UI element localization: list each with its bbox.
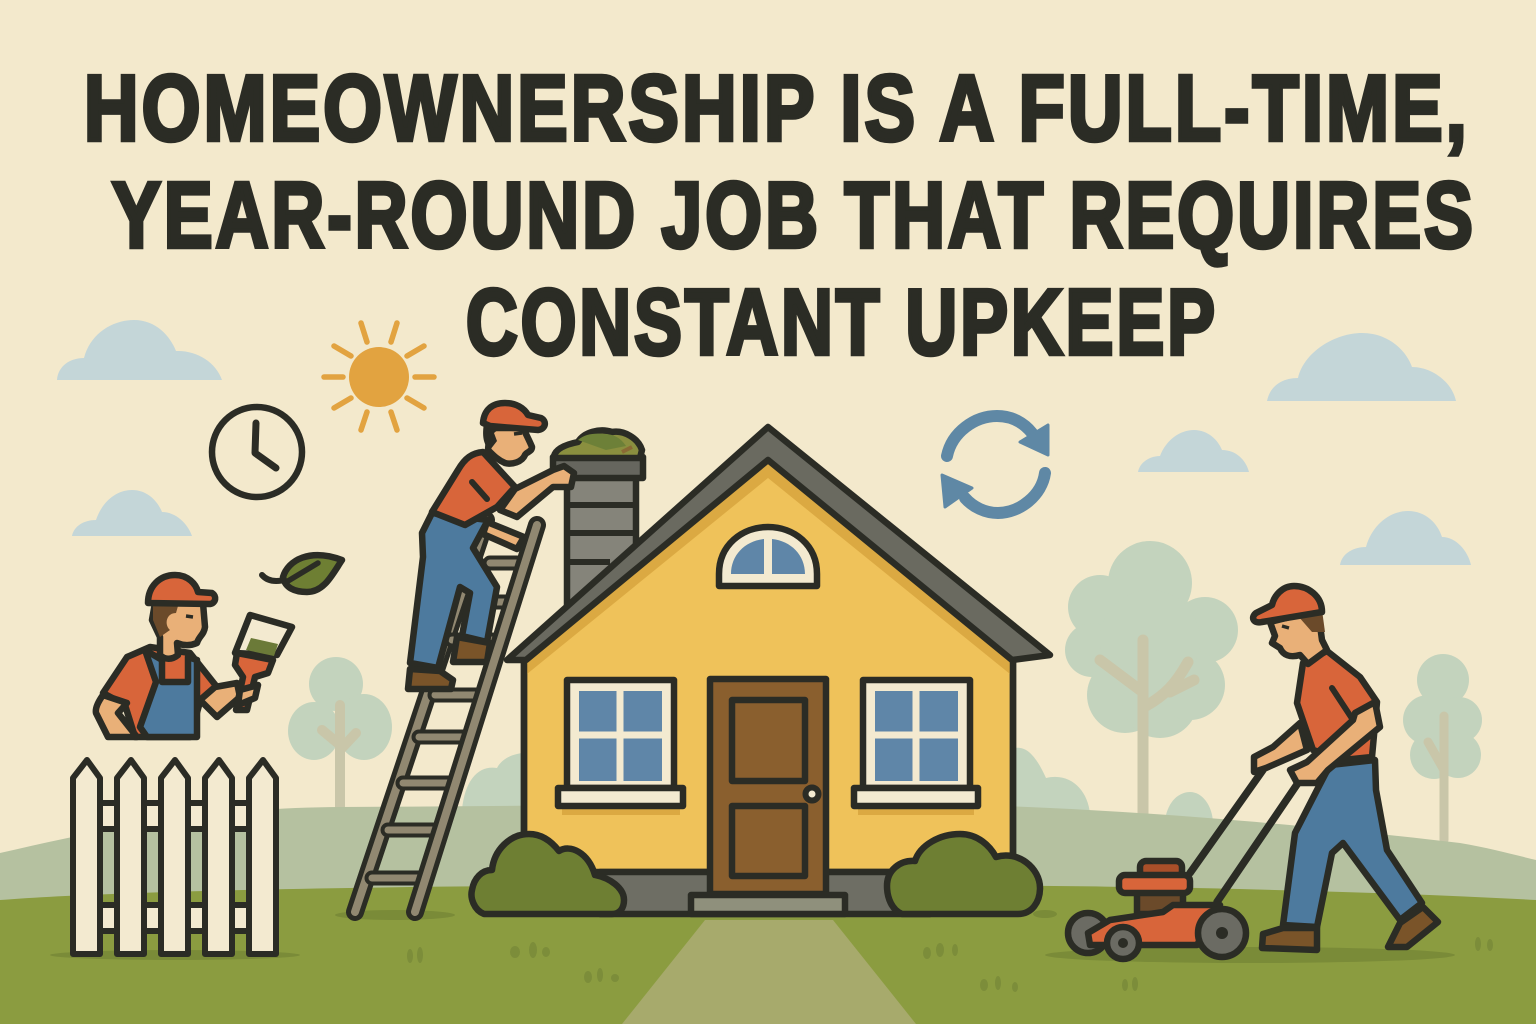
lawn mower — [1068, 770, 1298, 959]
ladder front rail — [415, 525, 537, 912]
title — [84, 56, 1476, 374]
front arm — [500, 466, 574, 517]
left window — [558, 680, 683, 815]
background trees — [288, 541, 1482, 840]
attic window — [719, 527, 817, 586]
door — [710, 679, 826, 894]
right window — [854, 680, 978, 815]
hair — [483, 423, 500, 450]
face — [1270, 610, 1327, 664]
shirt — [1297, 651, 1377, 760]
door step — [691, 895, 845, 914]
icon: sun — [324, 323, 434, 430]
shirt — [103, 647, 217, 737]
chimney — [553, 430, 643, 610]
ladder — [355, 520, 517, 912]
head — [152, 603, 205, 659]
far arm — [1254, 723, 1307, 772]
hills — [0, 804, 1536, 1024]
lawn — [0, 885, 1536, 1024]
icon: cycle arrows — [942, 416, 1048, 513]
painter — [96, 575, 240, 737]
foundation — [600, 872, 930, 914]
paintbrush — [235, 615, 292, 710]
bush behind fence — [211, 841, 225, 920]
hair — [1298, 610, 1325, 632]
pants — [410, 513, 497, 668]
worker on ladder — [408, 403, 574, 689]
shrub left — [472, 834, 624, 914]
near arm — [1290, 702, 1380, 783]
clouds — [57, 320, 1471, 565]
face — [488, 428, 532, 464]
front boot — [1262, 928, 1317, 950]
title: CONSTANT UPKEEP — [466, 270, 1218, 374]
back arm — [483, 522, 524, 549]
overalls — [140, 650, 197, 737]
house — [472, 427, 1050, 914]
roof — [507, 427, 1050, 660]
icon: clock — [212, 407, 302, 497]
cap — [483, 403, 545, 430]
cap — [148, 575, 215, 604]
upper boot — [453, 637, 490, 662]
house wall — [524, 462, 1013, 872]
grass tufts — [407, 937, 1493, 992]
rear boot — [1388, 907, 1438, 947]
torso — [432, 452, 515, 525]
icon: leaf — [262, 555, 342, 592]
mower worker — [1253, 586, 1438, 950]
left arm — [96, 695, 137, 737]
right arm — [200, 683, 240, 717]
garden path — [622, 920, 916, 1024]
shrub right — [887, 834, 1040, 914]
ground shadows — [50, 910, 1455, 963]
cap — [1253, 586, 1322, 622]
lower boot — [408, 669, 453, 689]
white picket fence — [73, 760, 276, 954]
pants — [1283, 760, 1422, 927]
hair — [153, 606, 178, 637]
